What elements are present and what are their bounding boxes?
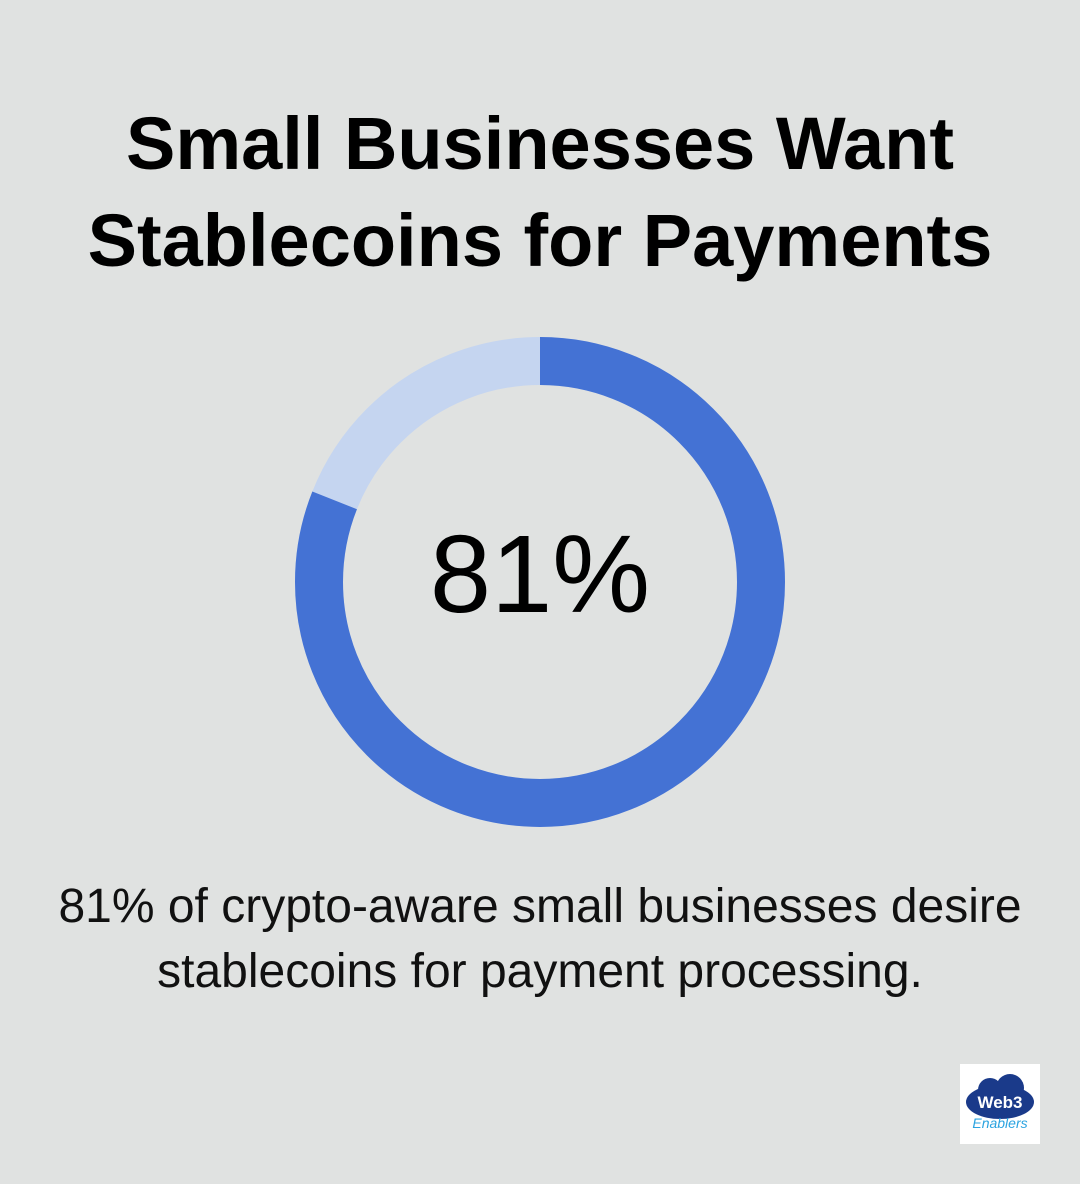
caption <box>58 880 1022 998</box>
logo: Enablers <box>972 1115 1028 1131</box>
center value: 81% <box>430 513 650 636</box>
caption: 81% of crypto-aware small businesses desire <box>58 880 1022 933</box>
logo <box>960 1064 1040 1144</box>
title: Stablecoins for Payments <box>88 199 992 282</box>
title: Small Businesses Want <box>126 102 954 185</box>
caption: stablecoins for payment processing. <box>157 945 923 998</box>
logo: Web3 <box>977 1093 1023 1112</box>
title <box>88 102 992 282</box>
